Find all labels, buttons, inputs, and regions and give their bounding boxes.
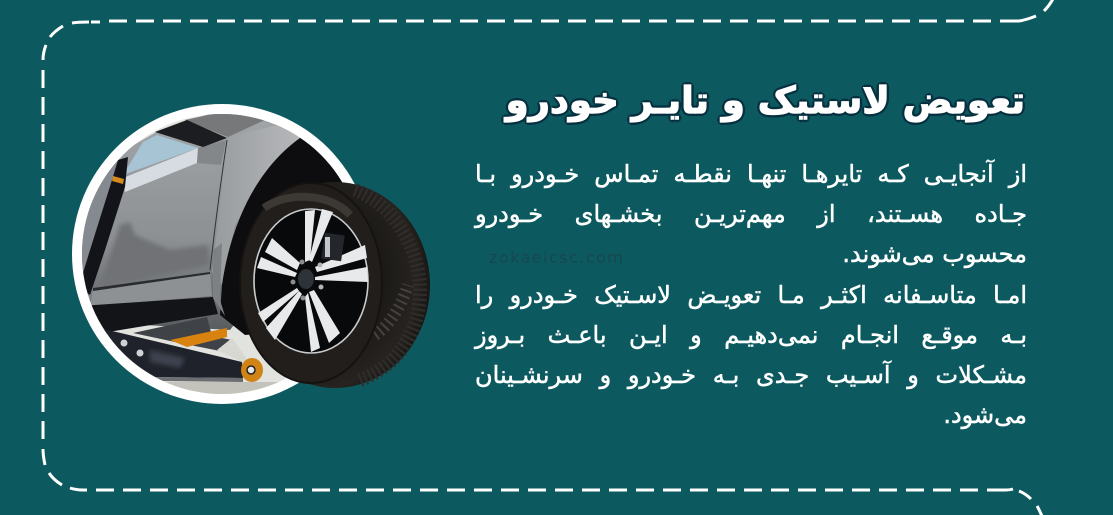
- wheel rim: [254, 209, 368, 353]
- body text: محسوب می‌شوند.: [842, 240, 1027, 268]
- title: تعویض لاستیک و تایـر خودرو: [506, 79, 1025, 122]
- body text: می‌شود.: [943, 401, 1027, 429]
- body text: [474, 158, 1027, 430]
- body text: امـا متاسـفانه اکثـر مـا تعویـض لاسـتیک خـودرو را: [475, 281, 1027, 309]
- photo: car on jack with spare tire: [72, 104, 430, 404]
- body text: جـاده هسـتند، از مهم‌تریـن بخشـهای خـودرو: [475, 200, 1027, 228]
- spare tire: [240, 182, 430, 388]
- body text: از آنجایـی کـه تایرهـا تنهـا نقطـه تمـاس خـودرو بـا: [475, 160, 1027, 188]
- watermark: zokaeicsc.com: [489, 248, 624, 267]
- body text: بـه موقـع انجـام نمی‌دهیـم و ایـن باعـث بـروز: [475, 321, 1027, 349]
- car photo inside circle: [82, 114, 342, 394]
- jack orange wheel: [241, 358, 263, 382]
- white ring: [72, 104, 372, 404]
- body text: مشـکلات و آسـیب جـدی بـه خـودرو و سرنشـینان: [475, 361, 1027, 389]
